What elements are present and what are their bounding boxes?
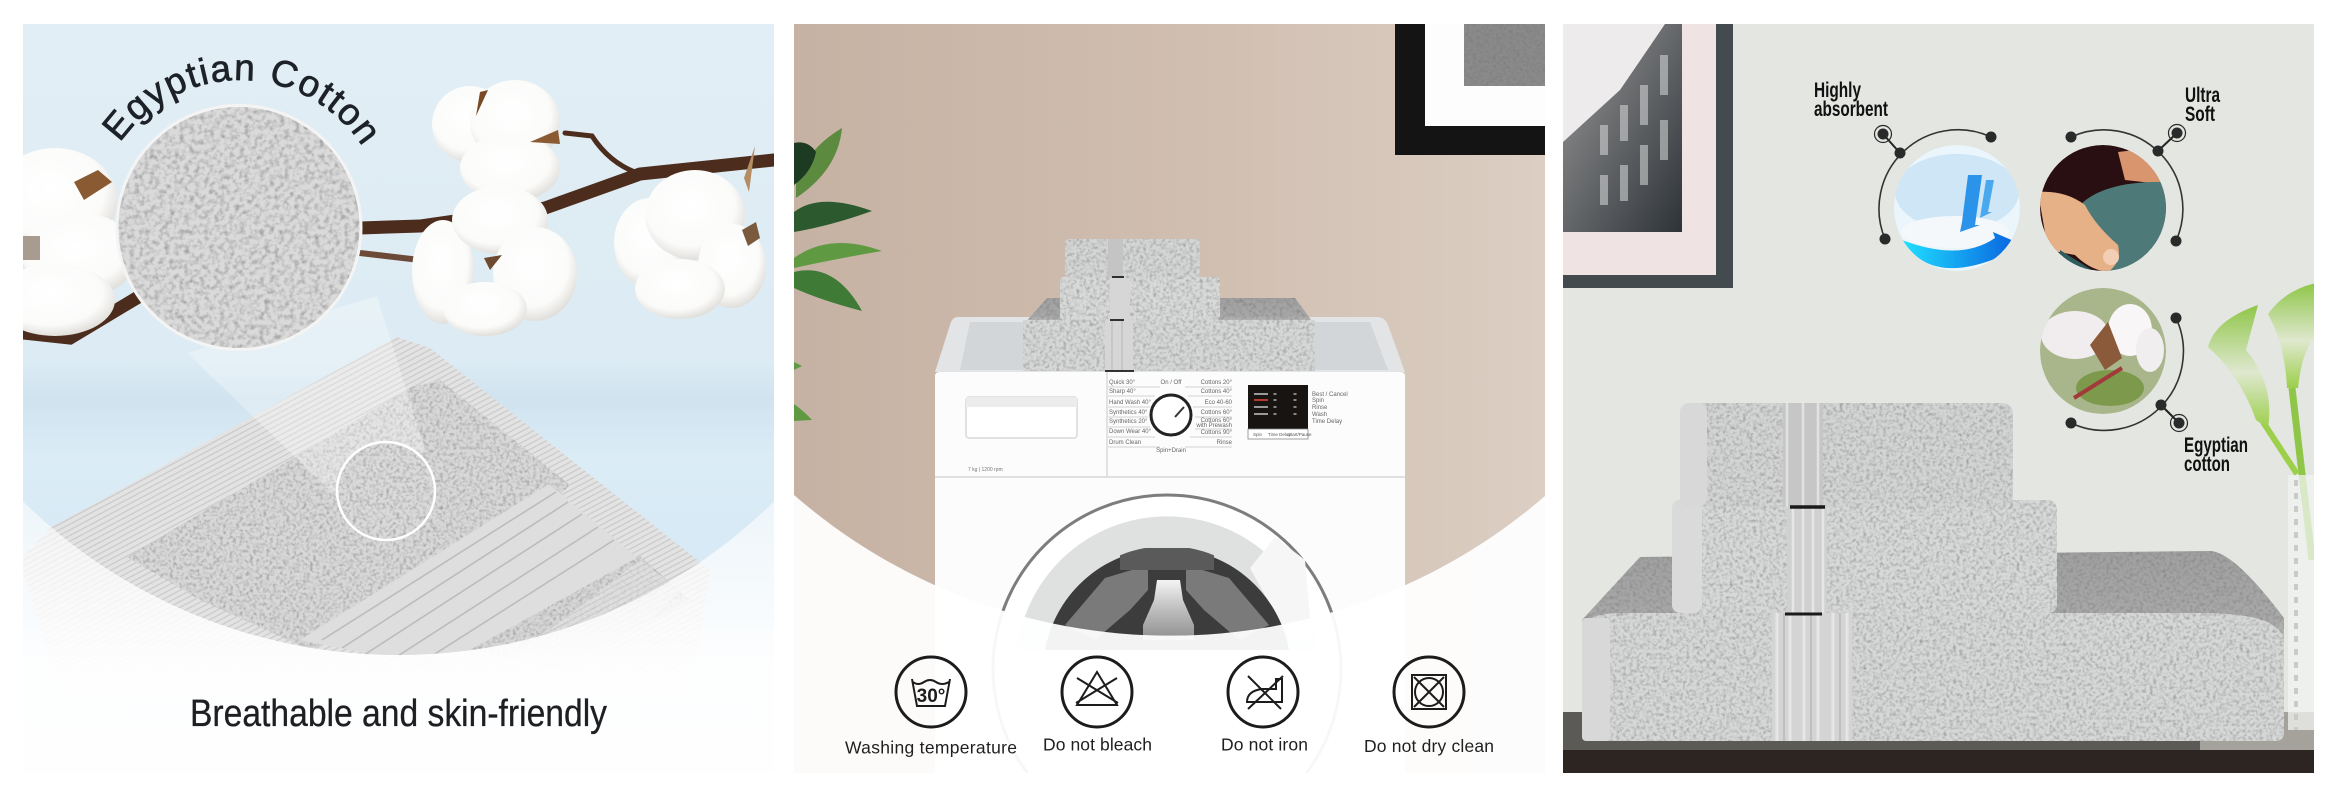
translucent magnifier wedge	[187, 296, 425, 500]
programme labels: Eco 40-60	[1205, 400, 1233, 406]
machine top	[935, 317, 1405, 372]
hand towel	[1672, 500, 2057, 614]
washing machine: Start/Pause	[1288, 432, 1312, 437]
programme labels: Cottons 20°	[1201, 380, 1233, 386]
care icon: washing temperature: 30°	[917, 686, 945, 707]
wash cloth	[1680, 403, 2013, 507]
label: absorbent	[1814, 98, 1888, 121]
panel: washing care	[794, 24, 1545, 773]
care icon: do not dry clean	[1394, 657, 1464, 727]
washing machine: Spin	[1253, 432, 1263, 437]
label: cotton	[2184, 453, 2230, 476]
label: Highly	[1814, 79, 1861, 102]
care icon: do not iron	[1228, 657, 1298, 727]
programme labels: Hand Wash 40°	[1109, 400, 1151, 406]
white lower area	[23, 502, 774, 773]
programme labels: Down Wear 40°	[1109, 429, 1152, 435]
label: Soft	[2185, 103, 2215, 126]
programme labels: Spin+Drain	[1156, 448, 1186, 454]
care labels: Do not bleach	[1043, 734, 1152, 754]
detergent drawer	[966, 397, 1077, 438]
panel: Egyptian cotton close-up	[23, 24, 774, 734]
cotton boll: left	[23, 148, 127, 336]
plant	[794, 128, 882, 421]
machine body	[935, 372, 1405, 612]
programme labels: Time Delay	[1312, 419, 1342, 425]
programme labels: Wash	[1312, 412, 1327, 418]
care labels	[845, 738, 1493, 757]
bath towel	[1582, 551, 2284, 741]
door	[1002, 494, 1333, 650]
cotton boll: top	[432, 80, 560, 202]
icon: absorbent pad	[1894, 145, 2020, 271]
feature: highly absorbent	[1814, 79, 2020, 271]
icon: cotton plant	[2040, 288, 2166, 414]
care labels: Washing temperature	[845, 738, 1017, 758]
washing machine	[935, 317, 1405, 650]
programme labels	[1109, 380, 1348, 454]
care icon: do not bleach	[1062, 657, 1132, 727]
programme labels: with Prewash	[1195, 423, 1232, 429]
small magnifier circle	[337, 442, 435, 540]
cotton branch	[23, 133, 774, 338]
icon: hand feeling towel	[2038, 145, 2170, 278]
cotton boll: centre	[412, 186, 577, 336]
panel: towel set features	[1563, 24, 2316, 773]
programme labels: Cottons 90°	[1201, 430, 1233, 436]
feature: egyptian cotton	[2040, 288, 2248, 476]
care labels: Do not dry clean	[1364, 736, 1494, 756]
programme labels: Synthetics 40°	[1109, 410, 1148, 416]
programme labels: Spin	[1312, 398, 1324, 404]
programme labels: Cottons 60°	[1201, 418, 1233, 424]
cotton boll: right	[614, 146, 766, 319]
washing machine: Time Delay	[1268, 432, 1291, 437]
care labels: Do not iron	[1221, 734, 1308, 754]
label: Ultra	[2185, 84, 2220, 107]
programme labels: Cottons 40°	[1201, 389, 1233, 395]
label: Egyptian	[2184, 434, 2248, 457]
plant and vase	[2208, 283, 2316, 730]
washer towels	[1023, 239, 1315, 371]
caption: Breathable and skin-friendly	[190, 693, 607, 735]
large magnifier circle: terry texture	[117, 106, 361, 350]
washing machine: 7 kg | 1200 rpm	[968, 467, 1003, 473]
shelf	[1563, 712, 2314, 773]
programme labels: Rinse	[1312, 405, 1328, 411]
dial	[1151, 395, 1191, 435]
programme labels: Best / Cancel	[1312, 392, 1348, 398]
feature: ultra soft	[2038, 84, 2220, 278]
programme labels: Rinse	[1217, 440, 1233, 446]
wall picture	[1563, 24, 1733, 288]
programme labels: Synthetics 20°	[1109, 419, 1148, 425]
programme labels: Drum Clean	[1109, 440, 1141, 446]
display	[1248, 385, 1308, 429]
folded towel	[23, 337, 710, 655]
programme labels: On / Off	[1161, 380, 1182, 386]
wall picture frame	[1395, 24, 1545, 155]
programme labels: Sharp 40°	[1109, 389, 1136, 395]
programme labels: Quick 30°	[1109, 380, 1136, 386]
curved title: Egyptian Cotton	[102, 57, 376, 145]
white lower area	[794, 495, 1545, 773]
programme labels: Cottons 60°	[1201, 410, 1233, 416]
care icon: washing temperature	[896, 657, 966, 727]
